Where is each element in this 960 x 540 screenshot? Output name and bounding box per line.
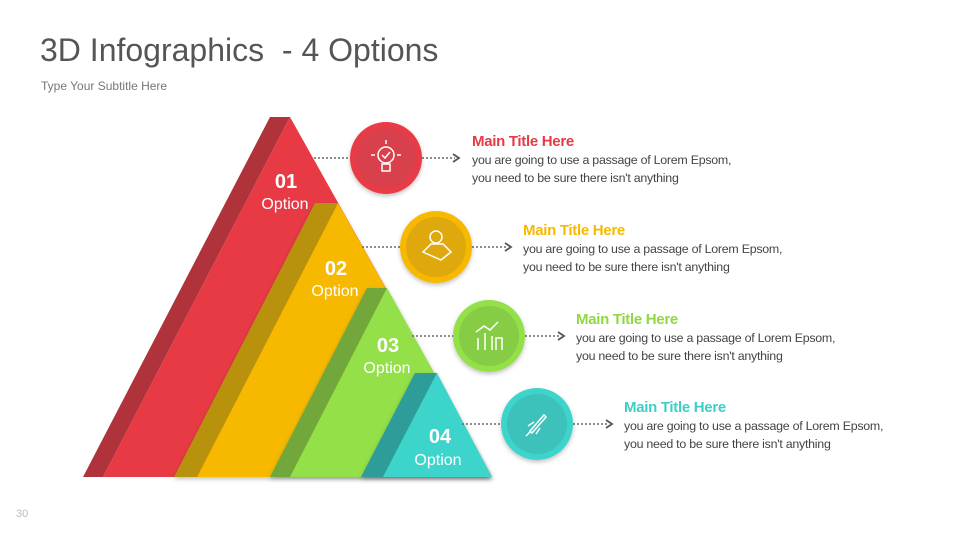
- icon circle 01 bulb: [350, 122, 422, 194]
- text block 04: you are going to use a passage of Lorem Epsom,: [624, 419, 883, 433]
- title: 3D Infographics - 4 Options: [40, 32, 438, 68]
- text block 01: you are going to use a passage of Lorem Epsom,: [472, 153, 731, 167]
- arrowheads: [453, 154, 612, 428]
- text block 02: Main Title Here: [523, 222, 625, 239]
- layer 02 yellow: 02: [325, 258, 347, 280]
- text block 02: you need to be sure there isn't anything: [523, 260, 730, 274]
- icon circle 03 chart: [453, 300, 525, 372]
- layer 03 green: [270, 288, 492, 477]
- text block 04: Main Title Here: [624, 399, 726, 416]
- text block 01: Main Title Here: [472, 133, 574, 150]
- text block 01: [472, 133, 731, 185]
- layer 03 green: Option: [363, 360, 411, 377]
- layer 04 teal: Option: [414, 452, 462, 469]
- connectors: [314, 158, 608, 424]
- text block 02: [523, 222, 782, 274]
- text block 04: [624, 399, 883, 451]
- icon circle 04 rocket: [501, 388, 573, 460]
- layer 04 teal: 04: [429, 426, 452, 448]
- layer 02 yellow: [174, 203, 492, 477]
- icon circle 02 handshake: [400, 211, 472, 283]
- layer 03 green: 03: [377, 335, 399, 357]
- text block 01: you need to be sure there isn't anything: [472, 171, 679, 185]
- text block 03: you are going to use a passage of Lorem Epsom,: [576, 331, 835, 345]
- text block 03: you need to be sure there isn't anything: [576, 349, 783, 363]
- layer 04 teal: [361, 373, 492, 477]
- text block 02: you are going to use a passage of Lorem Epsom,: [523, 242, 782, 256]
- text block 04: you need to be sure there isn't anything: [624, 437, 831, 451]
- layer 01 red: Option: [261, 196, 309, 213]
- layer 01 red: 01: [275, 171, 297, 193]
- layer 02 yellow: Option: [311, 283, 359, 300]
- page number: 30: [16, 508, 28, 520]
- layer 01 red: [83, 117, 492, 477]
- text block 03: [576, 311, 835, 363]
- subtitle: Type Your Subtitle Here: [41, 79, 167, 93]
- text block 03: Main Title Here: [576, 311, 678, 328]
